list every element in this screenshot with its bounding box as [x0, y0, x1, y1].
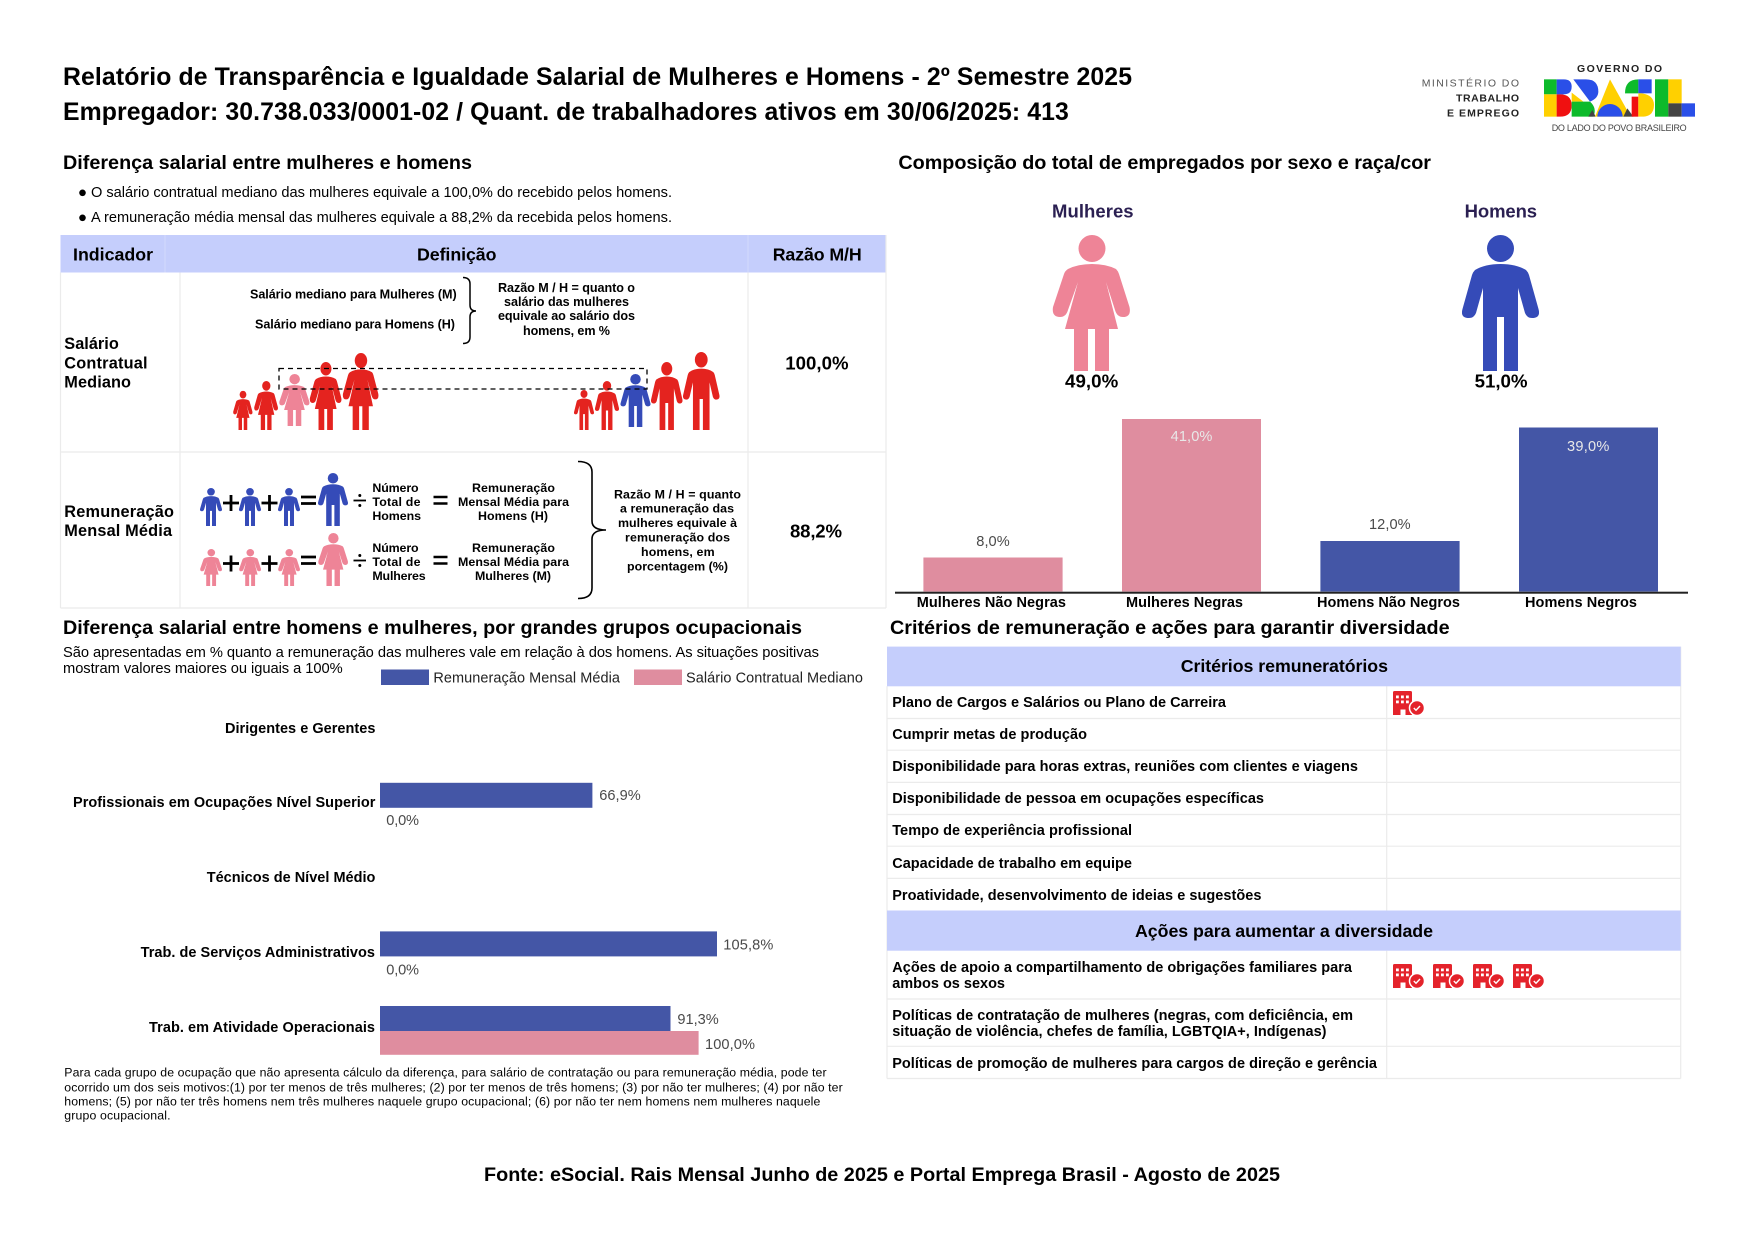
definition text: razão remuneração: Razão M / H = quanto	[614, 488, 741, 502]
row: remuneração mensal média: Remuneração	[64, 503, 174, 521]
brace	[463, 278, 476, 344]
figure: mulheres	[1052, 201, 1134, 392]
header: critérios remuneratórios: Critérios remuneratórios	[1181, 656, 1388, 676]
definition text: razão: Razão M / H = quanto o	[498, 281, 635, 295]
bullets: resumo da diferença salarial	[79, 185, 672, 226]
dashed box: medianas	[279, 368, 647, 389]
equation: homens: Número	[372, 481, 419, 495]
figure: homens: Homens	[1465, 201, 1537, 222]
header: ações: Ações para aumentar a diversidade	[1135, 921, 1433, 941]
figure: homens	[1462, 201, 1539, 392]
bar chart: composição por sexo e raça/cor: 41,0%	[1171, 429, 1212, 445]
footnote: ocorrido um dos seis motivos:(1) por ter menos de três mulheres; (2) por ter menos de três homens; (3) por não ter mulheres; (4) por não ter	[64, 1081, 843, 1095]
legend: Salário Contratual Mediano	[686, 670, 863, 686]
bar chart: composição por sexo e raça/cor: Mulheres Não Negras	[917, 595, 1066, 611]
rows: ações: situação de violência, chefes de família, LGBTQIA+, Indígenas)	[892, 1024, 1327, 1040]
header: critérios remuneratórios	[887, 647, 1681, 686]
heading: diferença salarial: Diferença salarial entre mulheres e homens	[63, 152, 472, 174]
definition text: salário mediano: Salário mediano para Mulheres (M)	[250, 288, 457, 302]
row: salário contratual mediano	[64, 278, 849, 430]
icons: empresas com ações	[1393, 964, 1544, 988]
table header: Definição	[417, 244, 497, 264]
table header: Razão M/H	[773, 244, 862, 264]
logo: ministério e governo do Brasil: E EMPREGO	[1447, 108, 1519, 120]
definition text: razão	[498, 281, 635, 338]
figure: mulheres: Mulheres	[1052, 201, 1134, 222]
bar chart: grupos ocupacionais: 105,8%	[723, 938, 773, 954]
bullets: resumo da diferença salarial: O salário contratual mediano das mulheres equivale a 100,0% do recebido pelos homens.	[91, 185, 672, 201]
equation: homens: Homens	[372, 509, 421, 523]
row: salário contratual mediano: 100,0%	[785, 353, 849, 374]
figure: homens: 51,0%	[1475, 371, 1528, 392]
equation: mulheres: Total de	[372, 555, 421, 569]
equation: homens: Total de	[372, 495, 421, 509]
definition text: razão: equivale ao salário dos	[498, 309, 635, 323]
rows: critérios: Cumprir metas de produção	[892, 727, 1087, 743]
logo: ministério e governo do Brasil: MINISTÉRIO DO	[1422, 76, 1519, 90]
logo: ministério e governo do Brasil: GOVERNO DO	[1577, 63, 1662, 75]
rows: critérios: Capacidade de trabalho em equipe	[892, 856, 1132, 872]
rows: critérios: Disponibilidade de pessoa em ocupações específicas	[892, 791, 1264, 807]
heading: grupos ocupacionais: Diferença salarial entre homens e mulheres, por grandes grupos ocupacionais	[63, 617, 802, 639]
bar chart: composição por sexo e raça/cor: Mulheres Negras	[1126, 595, 1243, 611]
equation: mulheres	[200, 533, 569, 586]
definition text: razão remuneração: homens, em	[641, 545, 715, 559]
definition text: razão remuneração: remuneração dos	[625, 531, 730, 545]
logo: ministério e governo do Brasil: DO LADO DO POVO BRASILEIRO	[1552, 123, 1687, 133]
panel: tabela de indicadores	[60, 235, 886, 608]
bar chart: grupos ocupacionais: Trab. em Atividade Operacionais	[149, 1020, 375, 1036]
heading: composição: Composição do total de empregados por sexo e raça/cor	[898, 152, 1431, 174]
definition text: razão: homens, em %	[523, 324, 610, 338]
table header: Indicador	[73, 244, 153, 264]
text block: explicação: mostram valores maiores ou iguais a 100%	[63, 661, 343, 677]
bar chart: grupos ocupacionais: 91,3%	[677, 1012, 719, 1028]
rows: critérios	[892, 695, 1358, 904]
equation: mulheres: Remuneração	[472, 541, 555, 555]
equation: homens: Remuneração	[472, 481, 555, 495]
footer: fonte: Fonte: eSocial. Rais Mensal Junho de 2025 e Portal Emprega Brasil - Agosto de 2025	[484, 1164, 1280, 1186]
definition text: salário mediano: Salário mediano para Homens (H)	[255, 318, 455, 332]
rows: ações: Políticas de contratação de mulheres (negras, com deficiência, em	[892, 1008, 1353, 1024]
row: salário contratual mediano: Salário	[64, 335, 119, 353]
header: ações	[887, 910, 1681, 951]
footnote: Para cada grupo de ocupação que não apresenta cálculo da diferença, para salário de contratação ou para remuneração média, pode ter	[64, 1066, 827, 1080]
bar chart: composição por sexo e raça/cor: 12,0%	[1369, 517, 1411, 533]
definition text: razão remuneração	[614, 488, 741, 574]
icons: homens em fila	[574, 352, 720, 430]
definition text: razão remuneração: a remuneração das	[620, 502, 734, 516]
rows: ações: Políticas de promoção de mulheres para cargos de direção e gerência	[892, 1056, 1378, 1072]
logo: ministério e governo do Brasil: TRABALHO	[1456, 92, 1519, 104]
bar chart: composição por sexo e raça/cor: Homens Negros	[1525, 595, 1637, 611]
bar chart: composição por sexo e raça/cor	[895, 419, 1688, 611]
row: salário contratual mediano: Mediano	[64, 374, 131, 392]
bar chart: grupos ocupacionais: Técnicos de Nível Médio	[207, 870, 376, 886]
bar chart: grupos ocupacionais: 100,0%	[705, 1037, 755, 1053]
rows: ações: ambos os sexos	[892, 976, 1005, 992]
heading: critérios: Critérios de remuneração e ações para garantir diversidade	[890, 617, 1450, 639]
rows: ações: Ações de apoio a compartilhamento de obrigações familiares para	[892, 960, 1353, 976]
row: remuneração mensal média: 88,2%	[790, 521, 842, 542]
logo: ministério e governo do Brasil	[1422, 63, 1695, 133]
figure: mulheres: 49,0%	[1065, 371, 1119, 392]
footnote: homens; (5) por não ter três homens nem três mulheres naquele grupo ocupacional; (6) por não ter nem homens nem mulheres naquele	[64, 1095, 820, 1109]
row: remuneração mensal média: Mensal Média	[64, 522, 173, 540]
rows: critérios: Plano de Cargos e Salários ou Plano de Carreira	[892, 695, 1227, 711]
legend: Remuneração Mensal Média	[433, 670, 621, 686]
bar chart: grupos ocupacionais	[73, 721, 773, 1055]
definition text: razão remuneração: porcentagem (%)	[627, 560, 728, 574]
bar chart: grupos ocupacionais: 66,9%	[599, 788, 641, 804]
bar chart: composição por sexo e raça/cor: Homens Não Negros	[1317, 595, 1460, 611]
rows: critérios: Disponibilidade para horas extras, reuniões com clientes e viagens	[892, 759, 1358, 775]
definition text: salário mediano	[250, 288, 457, 332]
legend	[381, 670, 863, 686]
icon: empresa com critério	[1393, 691, 1424, 716]
equation: homens: Homens (H)	[478, 509, 548, 523]
definition text: razão: salário das mulheres	[504, 295, 629, 309]
equation: mulheres: Número	[372, 541, 419, 555]
large brace	[578, 462, 606, 598]
text block: explicação	[63, 645, 819, 677]
equation: homens	[200, 473, 569, 526]
equation: mulheres: Mulheres	[372, 569, 426, 583]
rows: critérios: Proatividade, desenvolvimento de ideias e sugestões	[892, 888, 1261, 904]
bar chart: composição por sexo e raça/cor: 39,0%	[1567, 439, 1609, 455]
table header	[60, 235, 886, 272]
bar chart: grupos ocupacionais: 0,0%	[386, 962, 419, 978]
title	[63, 64, 1132, 126]
bullets: resumo da diferença salarial: A remuneração média mensal das mulheres equivale a 88,2% da recebida pelos homens.	[91, 210, 672, 226]
equation: mulheres: Mulheres (M)	[475, 569, 551, 583]
footnote: grupo ocupacional.	[64, 1109, 170, 1123]
bar chart: grupos ocupacionais: Profissionais em Ocupações Nível Superior	[73, 795, 376, 811]
bar chart: grupos ocupacionais: Trab. de Serviços Administrativos	[141, 945, 375, 961]
text block: explicação: São apresentadas em % quanto a remuneração das mulheres vale em relação à dos homens. As situações positivas	[63, 645, 819, 661]
title: Empregador: 30.738.033/0001-02 / Quant. de trabalhadores ativos em 30/06/2025: 413	[63, 99, 1069, 126]
bar chart: composição por sexo e raça/cor: 8,0%	[976, 534, 1010, 550]
footnote	[64, 1066, 843, 1123]
icons: mulheres em fila	[233, 353, 378, 430]
equation: mulheres: Mensal Média para	[458, 555, 569, 569]
row: remuneração mensal média	[64, 462, 842, 598]
equation: homens: Mensal Média para	[458, 495, 569, 509]
bar chart: grupos ocupacionais: 0,0%	[386, 813, 419, 829]
rows: ações	[892, 960, 1378, 1072]
row: salário contratual mediano: Contratual	[64, 354, 148, 372]
panel: tabela de critérios e ações	[887, 647, 1681, 1078]
definition text: razão remuneração: mulheres equivale à	[618, 516, 737, 530]
bar chart: grupos ocupacionais: Dirigentes e Gerentes	[225, 721, 375, 737]
rows: critérios: Tempo de experiência profissional	[892, 823, 1132, 839]
title: Relatório de Transparência e Igualdade Salarial de Mulheres e Homens - 2º Semestre 2025	[63, 64, 1132, 91]
